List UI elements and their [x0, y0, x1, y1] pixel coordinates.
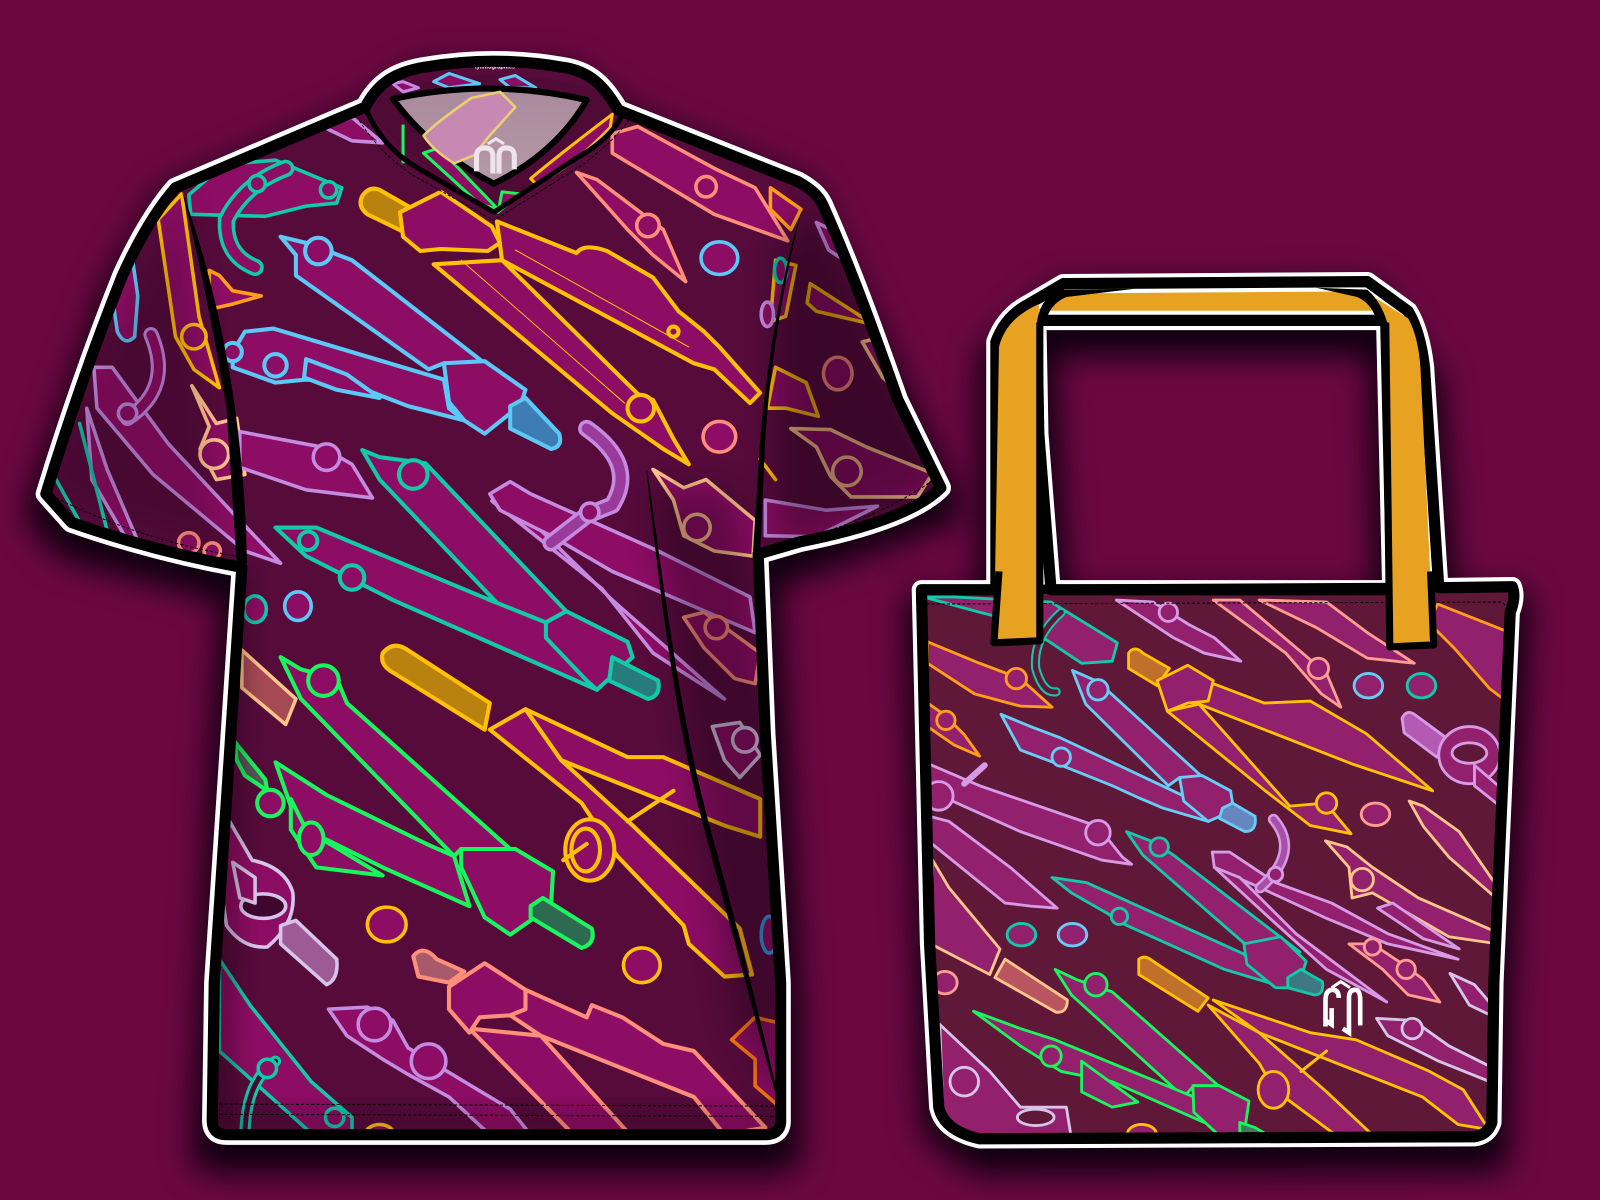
- compass: orange left: [928, 642, 1052, 756]
- compass: grey small: [1450, 973, 1492, 1015]
- compass: teal middle large: [276, 450, 659, 699]
- compass: yellow bottom large: [382, 646, 760, 977]
- compass: yellow top large: [361, 189, 760, 464]
- compass: blue center: [1001, 670, 1255, 832]
- compass: orange right: [1429, 604, 1510, 704]
- t-shirt compass pattern: [56, 117, 933, 1145]
- compass: blue sleeve cylinder: [112, 260, 138, 341]
- compass: lilac middle: [1212, 819, 1459, 1002]
- disc: blue bag top: [1354, 673, 1383, 698]
- compass: yellow left sleeve leg: [158, 194, 219, 388]
- compass: lilac lower right sleeve: [765, 500, 878, 537]
- compass: peach right sleeve: [791, 339, 933, 497]
- compass: grey right knob: [712, 722, 760, 778]
- compass: grey pen right: [1377, 1018, 1490, 1082]
- compass: salmon right middle: [684, 612, 760, 684]
- compass: yellow center: [1129, 649, 1433, 834]
- compass: teal top left: [189, 160, 342, 267]
- drop shadow: tote bag: [921, 300, 1512, 1157]
- bag logo: [1326, 982, 1360, 1033]
- compass: lilac ring right: [1402, 712, 1510, 806]
- neck logo: [477, 139, 514, 173]
- collar stitching: [359, 120, 629, 220]
- compass: lilac left sleeve: [87, 335, 281, 563]
- disc: salmon: [703, 421, 736, 452]
- strap fold left: [1037, 289, 1135, 324]
- t-shirt fabric folds and shading: [31, 194, 949, 1138]
- compass: lilac left: [924, 764, 1132, 908]
- compass: teal bottom left: [219, 959, 352, 1138]
- disc: salmon bag left: [933, 971, 957, 994]
- compass: orange small: [209, 270, 261, 308]
- bag top edge: [921, 587, 1512, 590]
- collar back band: [365, 75, 624, 212]
- compass: right yellow pen: [760, 260, 873, 480]
- t-shirt collar: [359, 64, 629, 220]
- neck inner compass print: [423, 92, 515, 163]
- t-shirt black outline: [46, 61, 941, 1135]
- collar front pattern: [393, 73, 612, 212]
- compass: orange top right corner: [770, 188, 801, 230]
- t-shirt fabric base: [46, 61, 941, 1135]
- tote bag: [921, 282, 1514, 1143]
- compass: blue: [223, 237, 560, 449]
- disc: yellow bag bottom: [1128, 1124, 1156, 1143]
- left strap edges: [994, 322, 1040, 643]
- compass: lilac sleeve piece: [814, 220, 840, 260]
- compass: orange bottom right: [732, 1017, 786, 1112]
- disc: teal upper: [774, 258, 787, 283]
- disc: yellow lower: [623, 948, 660, 983]
- bag stitching: [927, 602, 1508, 616]
- right strap edges: [1386, 322, 1434, 647]
- neck opening: [393, 89, 587, 184]
- disc: lilac: [761, 302, 773, 327]
- disc: salmon right: [823, 357, 852, 390]
- t-shirt fold line: [647, 471, 784, 1122]
- strap fold right: [1316, 288, 1388, 324]
- disc: blue lower: [761, 916, 778, 953]
- bag white sticker outline and gold handle arch: [921, 282, 1514, 1139]
- brand label text: tylinfographics: [475, 64, 515, 70]
- collar V outline: [365, 108, 622, 212]
- compass: peach left: [931, 860, 1067, 1012]
- compass: green: [235, 657, 593, 948]
- compass: salmon small: [1349, 939, 1440, 1002]
- compass: teal top: [923, 597, 1117, 692]
- compass: salmon bottom large: [413, 951, 765, 1138]
- compass: lilac right: [490, 429, 755, 699]
- compass: lilac top: [1116, 600, 1241, 661]
- disc: teal: [244, 596, 266, 622]
- compass: salmon top right: [577, 127, 788, 282]
- bag compass pattern: [923, 597, 1510, 1143]
- compass: peach right: [1326, 801, 1500, 944]
- compass: grey bottom left: [940, 1024, 1071, 1139]
- t-shirt right armhole seam: [753, 209, 802, 551]
- bag fabric panel: [921, 587, 1514, 1139]
- compass: lilac bottom: [329, 1007, 531, 1135]
- compass: teal center: [1052, 832, 1323, 995]
- compass: green: [973, 969, 1281, 1143]
- compass: peach right middle: [653, 469, 755, 556]
- compass: salmon sleeve piece: [179, 533, 220, 559]
- disc: blue upper: [701, 242, 738, 274]
- left strap: [994, 304, 1039, 643]
- disc: blue: [285, 592, 311, 620]
- right strap: [1372, 296, 1434, 647]
- disc: yellow: [367, 907, 406, 942]
- compass: peach cylinder: [242, 650, 296, 724]
- compass: yellow hem tip: [365, 1124, 394, 1145]
- compass: lilac collar tip: [324, 117, 383, 143]
- compass: salmon top: [1213, 600, 1414, 707]
- disc: blue bag lower: [1058, 923, 1087, 946]
- compass: grey ring: [219, 821, 337, 985]
- t-shirt white sticker outline: [46, 61, 941, 1135]
- disc: salmon bag middle: [1361, 803, 1390, 826]
- compass: yellow bottom: [1139, 957, 1489, 1139]
- drop shadow: t-shirt: [46, 86, 941, 1153]
- bag black outline: [921, 282, 1514, 1139]
- compass: teal sleeve lines: [56, 423, 107, 531]
- compass: peach and lilac arm: [192, 386, 245, 480]
- disc: teal bag top: [1407, 673, 1436, 698]
- t-shirt left armhole seam: [182, 190, 247, 563]
- disc: teal bag lower: [1007, 923, 1036, 946]
- t-shirt: [31, 61, 949, 1145]
